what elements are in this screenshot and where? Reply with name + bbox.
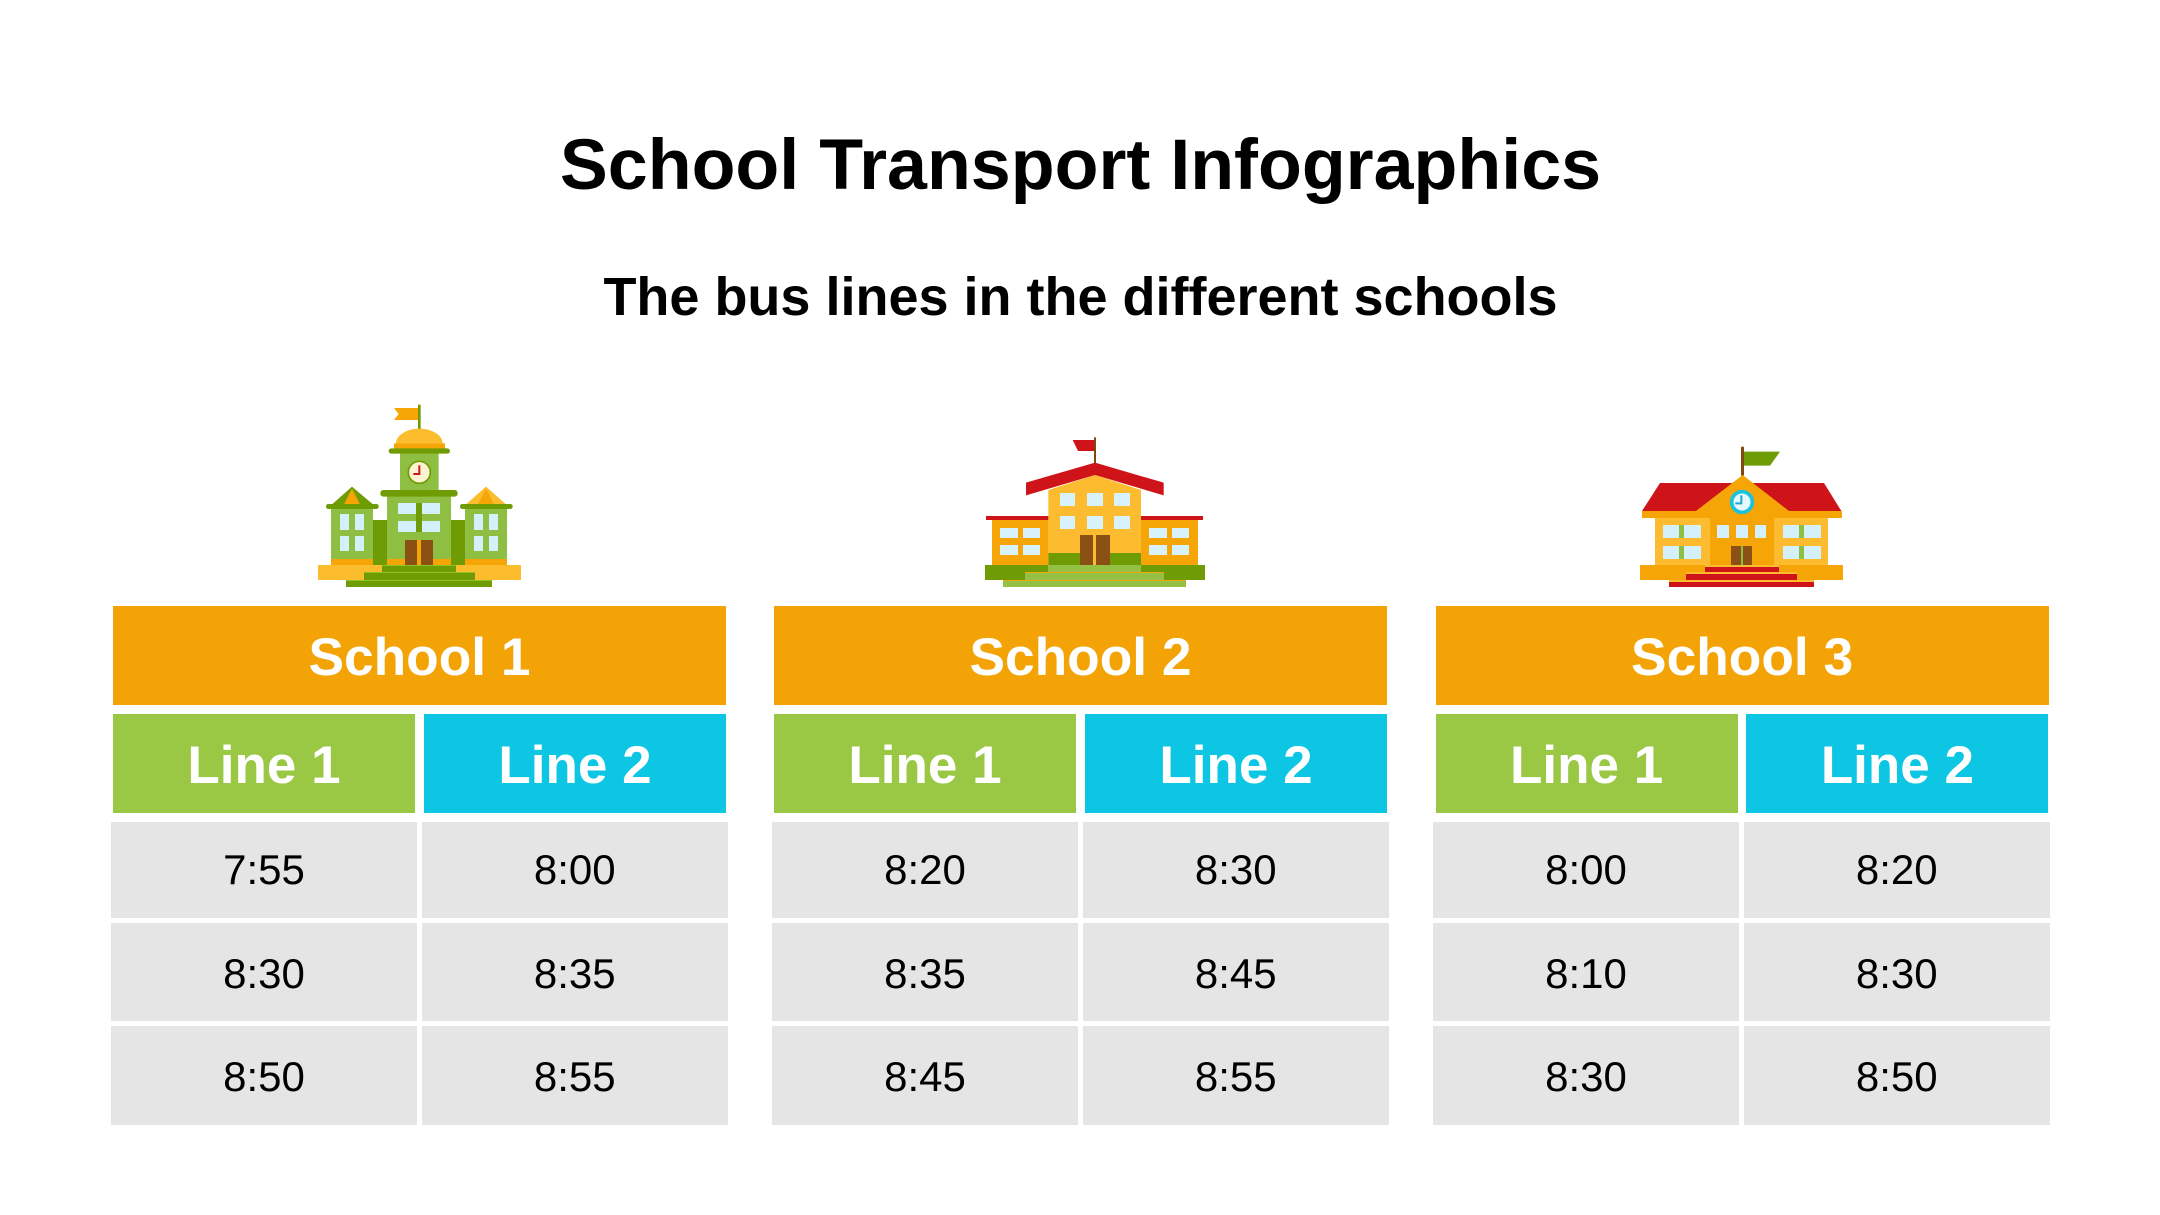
icon: orange school building with clock gable <box>1640 446 1843 587</box>
time cell: 8:00 <box>1545 846 1627 893</box>
time cell <box>1744 1026 2050 1125</box>
panel: school 3 <box>1433 446 2050 1125</box>
column header: line 1: Line 1 <box>187 736 341 794</box>
heading: school 1: School 1 <box>308 628 531 687</box>
time cell <box>111 1026 417 1125</box>
time cell <box>422 923 728 1021</box>
heading: school 3: School 3 <box>1631 628 1853 687</box>
time cell <box>111 923 417 1021</box>
time cell <box>1082 1026 1389 1125</box>
column header: line 1: Line 1 <box>848 736 1002 794</box>
time cell: 8:55 <box>534 1053 616 1100</box>
column header: line 1 <box>1436 714 1738 813</box>
time cell <box>422 822 728 918</box>
time cell: 8:55 <box>1195 1053 1277 1100</box>
time cell <box>772 1026 1078 1125</box>
heading: school 3 <box>1436 606 2049 705</box>
time cell <box>772 822 1078 918</box>
time cell: 8:50 <box>1856 1053 1938 1100</box>
column header: line 1 <box>113 714 415 813</box>
time cell: 8:10 <box>1545 950 1627 996</box>
heading: school 2 <box>774 606 1387 705</box>
time cell <box>1082 822 1389 918</box>
time cell: 7:55 <box>223 846 305 893</box>
panel: school 1 <box>111 404 728 1125</box>
time cell: 8:30 <box>223 950 305 996</box>
time cell: 8:30 <box>1195 846 1277 893</box>
icon: yellow school building with red roof <box>985 437 1205 587</box>
time cell: 8:35 <box>884 950 966 996</box>
column header: line 2 <box>1085 714 1387 813</box>
icon: green school building <box>318 404 521 587</box>
time cell <box>772 923 1078 1021</box>
column header: line 2: Line 2 <box>1821 736 1974 794</box>
time cell <box>1744 822 2050 918</box>
time cell <box>111 822 417 918</box>
time cell: 8:20 <box>1856 846 1938 893</box>
time cell: 8:45 <box>884 1053 966 1100</box>
heading: school 2: School 2 <box>969 628 1192 687</box>
panel: school 2 <box>772 437 1389 1125</box>
time cell: 8:20 <box>884 846 966 893</box>
time cell <box>1744 923 2050 1021</box>
column header: line 2 <box>424 714 726 813</box>
title: School Transport Infographics <box>560 125 1601 205</box>
time cell: 8:30 <box>1856 950 1938 996</box>
column header: line 2 <box>1746 714 2048 813</box>
time cell <box>1082 923 1389 1021</box>
subtitle: The bus lines in the different schools <box>603 267 1558 327</box>
time cell: 8:45 <box>1195 950 1277 996</box>
time cell <box>1433 822 1739 918</box>
column header: line 1 <box>774 714 1076 813</box>
time cell: 8:30 <box>1545 1053 1627 1100</box>
column header: line 1: Line 1 <box>1510 736 1663 794</box>
column header: line 2: Line 2 <box>498 736 652 794</box>
time cell <box>1433 923 1739 1021</box>
time cell: 8:00 <box>534 846 616 893</box>
time cell: 8:50 <box>223 1053 305 1100</box>
heading: school 1 <box>113 606 726 705</box>
time cell <box>422 1026 728 1125</box>
column header: line 2: Line 2 <box>1159 736 1313 794</box>
time cell: 8:35 <box>534 950 616 996</box>
time cell <box>1433 1026 1739 1125</box>
